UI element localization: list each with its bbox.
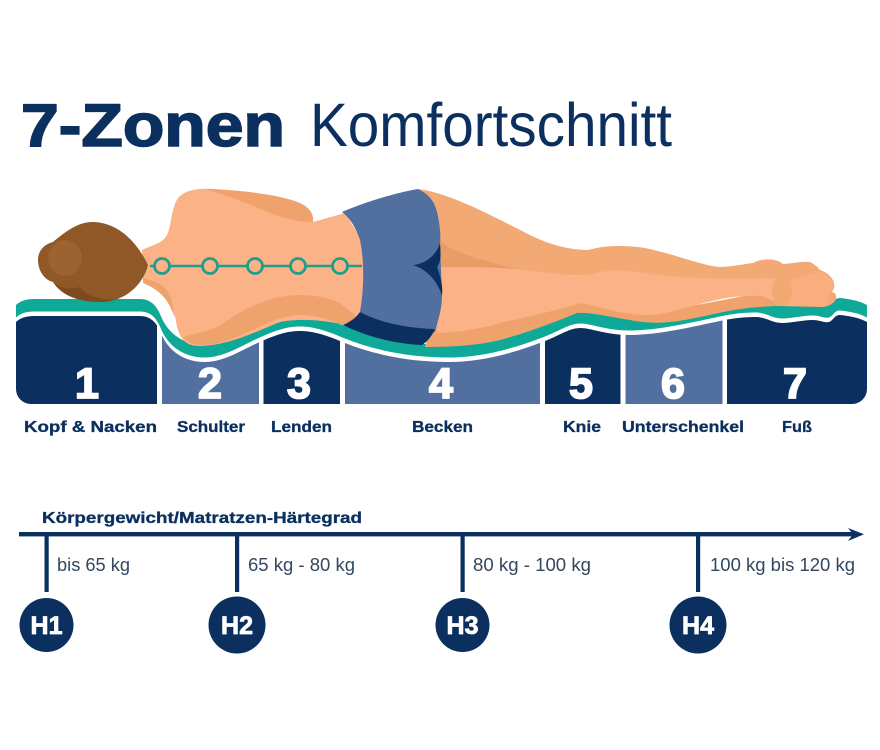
zone labels: Fuß: [782, 419, 813, 436]
axis label: Körpergewicht/Matratzen-Härtegrad: [42, 510, 362, 527]
neck shadow: [143, 278, 175, 318]
zone labels: Becken: [412, 419, 473, 436]
scale H4: H4: [682, 612, 714, 640]
title: [21, 91, 672, 159]
scale H2: 65 kg - 80 kg: [248, 555, 355, 575]
scale H1: H1: [31, 612, 63, 640]
zone numbers: 6: [661, 360, 685, 408]
title: 7-Zonen: [21, 92, 285, 159]
mattress: [16, 298, 867, 404]
upper arm shadow: [205, 189, 313, 222]
zone labels: [24, 419, 813, 436]
upper leg: [418, 189, 836, 307]
torso: [142, 189, 368, 346]
cover below mattress: [10, 404, 875, 424]
zone labels: Unterschenkel: [622, 419, 744, 436]
scale H3: 80 kg - 100 kg: [473, 555, 591, 575]
scale H3: H3: [447, 612, 478, 640]
teal comfort layer: [16, 298, 867, 403]
zone numbers: 5: [569, 360, 593, 408]
zone numbers: 4: [429, 360, 453, 408]
shorts centre fold: [413, 243, 442, 296]
foot: [786, 272, 833, 306]
lower leg: [437, 267, 780, 333]
leg underside shadow: [425, 292, 778, 347]
arrow: weight axis: [19, 528, 864, 541]
zone numbers: 3: [287, 360, 311, 408]
scale H1: bis 65 kg: [57, 555, 130, 575]
zone numbers: [75, 360, 807, 408]
title: Komfortschnitt: [310, 91, 672, 159]
shorts lower band: [343, 312, 435, 345]
scale H4: 100 kg bis 120 kg: [710, 555, 855, 575]
scale H3: [436, 534, 591, 652]
zone numbers: 1: [75, 360, 99, 408]
zone numbers: 7: [783, 360, 807, 408]
zone labels: Knie: [563, 419, 601, 436]
scale H4: [670, 534, 855, 654]
heel: [772, 274, 792, 306]
scale H2: H2: [221, 612, 253, 640]
lower back shadow: [183, 295, 358, 345]
spine zones: [150, 258, 362, 274]
shorts: [342, 189, 442, 336]
zone blocks: [16, 315, 867, 404]
zone labels: Lenden: [271, 419, 332, 436]
person lying on side: [38, 189, 836, 347]
white gap layer: [16, 310, 867, 416]
zone numbers: 2: [198, 360, 222, 408]
shadow between legs: [436, 235, 530, 272]
zone labels: Kopf & Nacken: [24, 419, 157, 436]
hair: [38, 222, 148, 302]
zone labels: Schulter: [177, 419, 245, 436]
scale H1: [20, 534, 130, 652]
scale H2: [208, 534, 355, 654]
